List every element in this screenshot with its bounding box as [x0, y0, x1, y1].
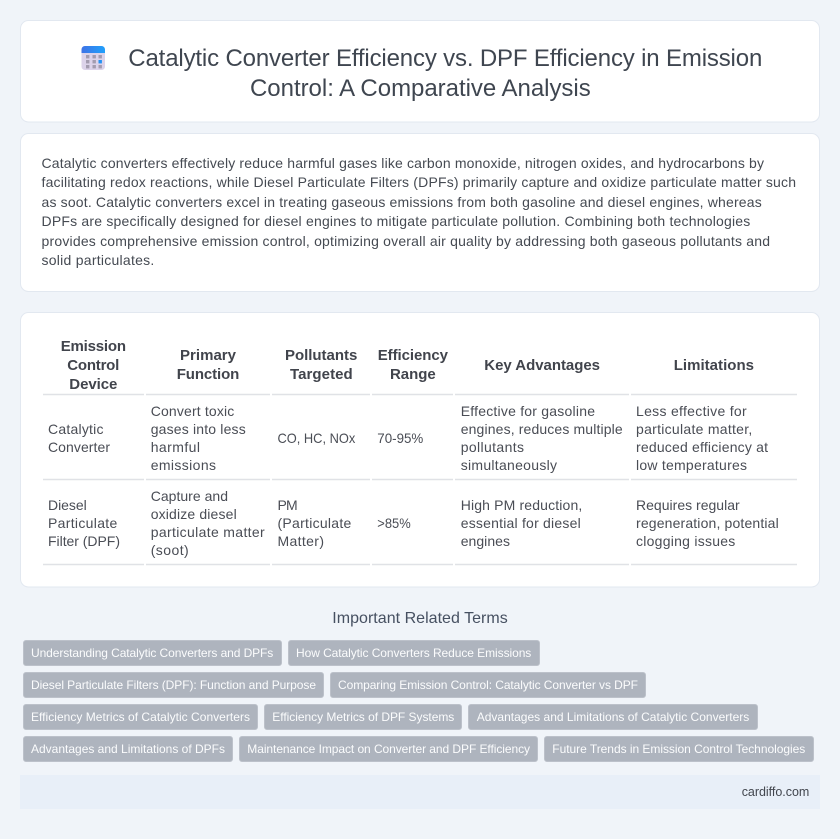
table row: catalytic converter: [48, 403, 768, 473]
table header row: Limitations: [674, 357, 754, 374]
table row: diesel particulate filter: (soot): [151, 542, 189, 558]
table row: diesel particulate filter: PM: [278, 497, 298, 513]
table row: catalytic converter: engines, reduces multiple: [461, 421, 623, 437]
table row: catalytic converter: Effective for gasoline: [461, 403, 595, 419]
table row: diesel particulate filter: Requires regular: [636, 497, 740, 513]
table row: diesel particulate filter: clogging issues: [636, 533, 735, 549]
table row: diesel particulate filter: Filter (DPF): [48, 533, 120, 549]
table row: catalytic converter: particulate matter,: [636, 421, 752, 437]
paragraph text: Catalytic converters effectively reduce harmful gases like carbon monoxide, nitrogen oxides, and hydrocarbons by: [42, 155, 764, 171]
table header row: Control: [67, 357, 119, 374]
footer band: [20, 775, 820, 809]
table row: catalytic converter: harmful: [151, 439, 200, 455]
table row: catalytic converter: reduced efficiency at: [636, 439, 768, 455]
title: Control: A Comparative Analysis: [250, 75, 591, 102]
table header row: [61, 338, 754, 393]
tag row 3: Efficiency Metrics of Catalytic Converters: [31, 710, 250, 724]
table row: catalytic converter: gases into less: [151, 421, 246, 437]
paragraph text: as soot. Catalytic converters excel in treating gaseous emissions from both gasoline and diesel engines, whereas: [42, 194, 762, 210]
title: [128, 45, 762, 102]
table row: catalytic converter: CO, HC, NOx: [278, 430, 355, 446]
tag row 4: Future Trends in Emission Control Technologies: [552, 742, 805, 756]
table row: catalytic converter: Catalytic: [48, 421, 104, 437]
related term tags: [24, 640, 814, 762]
table row: diesel particulate filter: essential for diesel: [461, 515, 581, 531]
table header row: Function: [177, 366, 239, 383]
title: Catalytic Converter Efficiency vs. DPF Efficiency in Emission: [128, 45, 762, 72]
paragraph text: DPFs are specifically designed for diesel engines to mitigate particulate pollution. Combining both technologies: [42, 213, 750, 229]
tag row 2: Comparing Emission Control: Catalytic Converter vs DPF: [338, 678, 638, 692]
table row: catalytic converter: pollutants: [461, 439, 524, 455]
table row: diesel particulate filter: >85%: [377, 515, 411, 531]
paragraph text: [42, 155, 796, 268]
tag row 2: [24, 672, 646, 698]
paragraph text: solid particulates.: [42, 252, 154, 268]
paragraph text: facilitating redox reactions, while Diesel Particulate Filters (DPFs) primarily capture and oxidize particulate matter such: [42, 174, 796, 190]
table row: catalytic converter: Convert toxic: [151, 403, 234, 419]
tag row 4: Advantages and Limitations of DPFs: [31, 742, 225, 756]
table header row: Emission: [61, 338, 126, 355]
tag row 4: Maintenance Impact on Converter and DPF Efficiency: [247, 742, 530, 756]
table header row: Key Advantages: [484, 357, 600, 374]
table header row: Pollutants: [285, 347, 357, 364]
table row: diesel particulate filter: engines: [461, 533, 510, 549]
table row: diesel particulate filter: High PM reduction,: [461, 497, 582, 513]
tag row 4: [24, 736, 814, 762]
tag row 1: [24, 640, 540, 666]
table header row: Targeted: [290, 366, 353, 383]
table row: diesel particulate filter: Diesel: [48, 497, 87, 513]
table row: catalytic converter: simultaneously: [461, 457, 557, 473]
tag row 1: How Catalytic Converters Reduce Emissions: [296, 646, 531, 660]
icon: calendar grid: [82, 46, 105, 70]
table row: diesel particulate filter: Particulate: [48, 515, 118, 531]
table row: diesel particulate filter: [48, 488, 779, 558]
table row: diesel particulate filter: particulate matter: [151, 524, 265, 540]
table row: catalytic converter: 70-95%: [377, 430, 423, 446]
table row: diesel particulate filter: regeneration, potential: [636, 515, 779, 531]
tag row 3: Efficiency Metrics of DPF Systems: [272, 710, 454, 724]
table row: diesel particulate filter: oxidize diesel: [151, 506, 237, 522]
table header row: Range: [390, 366, 436, 383]
tag row 3: [24, 704, 758, 730]
table header row: Primary: [180, 347, 237, 364]
footer site name: cardiffo.com: [742, 785, 809, 799]
table row: diesel particulate filter: Matter): [278, 533, 324, 549]
table header row: Efficiency: [378, 347, 449, 364]
panel: introduction paragraph: [20, 134, 820, 292]
tag row 2: Diesel Particulate Filters (DPF): Function and Purpose: [31, 678, 316, 692]
table row: diesel particulate filter: (Particulate: [278, 515, 352, 531]
panel: title header: [20, 20, 820, 122]
table header row: Device: [69, 376, 117, 393]
paragraph text: provides comprehensive emission control, optimizing overall air quality by addressing both gaseous pollutants and: [42, 233, 770, 249]
table row: catalytic converter: Converter: [48, 439, 110, 455]
table row: diesel particulate filter: Capture and: [151, 488, 228, 504]
table row: catalytic converter: Less effective for: [636, 403, 747, 419]
tag row 1: Understanding Catalytic Converters and DPFs: [31, 646, 273, 660]
panel: comparison table: [20, 312, 820, 587]
table row: catalytic converter: emissions: [151, 457, 216, 473]
tag row 3: Advantages and Limitations of Catalytic Converters: [477, 710, 749, 724]
table row: catalytic converter: low temperatures: [636, 457, 747, 473]
heading: related terms: Important Related Terms: [332, 610, 508, 627]
